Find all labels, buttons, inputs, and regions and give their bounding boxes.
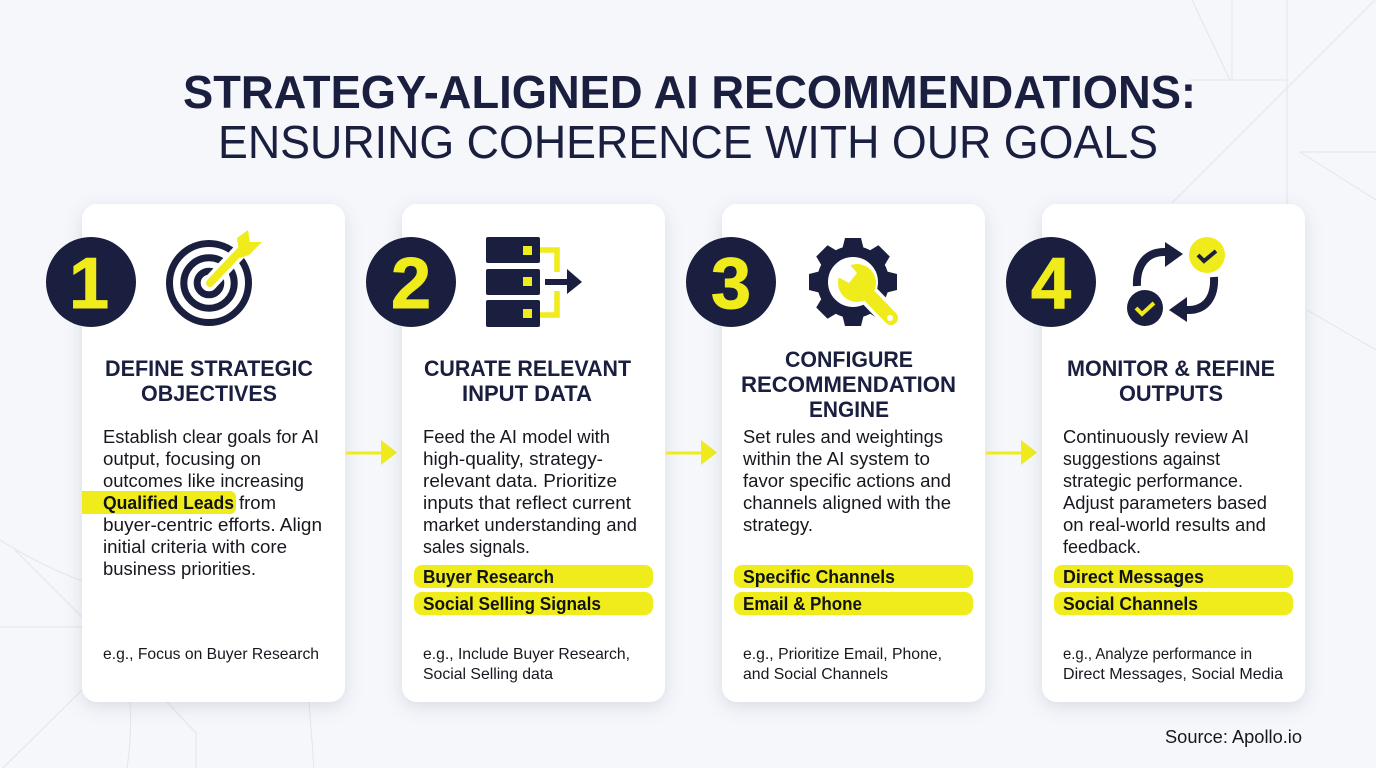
panel: step 3 configure recommendation engine [686,204,985,702]
body text: Adjust parameters based [1063,493,1267,513]
number badge 2 [366,237,456,327]
highlight tags: Social Channels [1063,594,1198,614]
body text: sales signals. [423,537,530,557]
number badge 1: 1 [69,244,109,324]
heading: CONFIGURE [785,347,913,372]
body text: high-quality, strategy- [423,449,603,469]
body text: relevant data. Prioritize [423,471,617,491]
highlight tags: Buyer Research [423,567,554,587]
icon: target with arrow [170,230,262,322]
body text: initial criteria with core [103,537,287,557]
body text: suggestions against [1063,449,1220,469]
heading [424,356,632,406]
example: e.g., Focus on Buyer Research [103,646,319,663]
highlight tags: Email & Phone [743,594,862,614]
highlight tags [734,565,973,615]
example [743,646,942,683]
example [423,646,630,683]
body text: buyer-centric efforts. Align [103,515,322,535]
highlight tags: Specific Channels [743,567,895,587]
panel: step 4 monitor and refine outputs [1006,204,1305,702]
icon: data servers with arrow [486,237,582,327]
body text [742,427,951,535]
body text: Establish clear goals for AI [103,427,319,447]
highlight tags [1054,565,1293,615]
arrow 3 to 4 [986,440,1037,465]
body text: channels aligned with the [743,493,951,513]
example: e.g., Prioritize Email, Phone, [743,646,942,663]
body text: inputs that reflect current [423,493,631,513]
heading: RECOMMENDATION [741,372,956,397]
highlight tags: Social Selling Signals [423,594,601,614]
body text [423,427,637,557]
heading [105,356,313,406]
example: e.g., Include Buyer Research, [423,646,630,663]
source: Source: Apollo.io [1165,727,1302,747]
body text: within the AI system to [742,449,930,469]
title: ENSURING COHERENCE WITH OUR GOALS [218,116,1158,168]
heading [1067,356,1275,406]
heading: INPUT DATA [462,381,592,406]
icon: gear and wrench [809,238,897,326]
example [1063,646,1283,683]
body text: outcomes like increasing [103,471,304,491]
number badge 1 [46,237,136,327]
panel: step 1 define strategic objectives [46,204,345,702]
heading: DEFINE STRATEGIC [105,356,313,381]
body text [1063,427,1267,557]
number badge 2: 2 [391,244,431,324]
heading [741,347,956,422]
icon: refresh cycle with checks [1127,237,1225,326]
number badge 4 [1006,237,1096,327]
heading: CURATE RELEVANT [424,356,632,381]
body text: Qualified Leads [103,493,234,513]
example: Direct Messages, Social Media [1063,666,1283,683]
heading: ENGINE [809,397,889,422]
example: Social Selling data [423,666,553,683]
heading: MONITOR & REFINE [1067,356,1275,381]
body text: business priorities. [103,559,256,579]
panel: step 2 curate relevant input data [366,204,665,702]
number badge 3 [686,237,776,327]
body text: feedback. [1063,537,1141,557]
body text: output, focusing on [103,449,261,469]
body text: Set rules and weightings [743,427,943,447]
arrow 2 to 3 [666,440,717,465]
number badge 3: 3 [711,244,751,324]
body text: market understanding and [423,515,637,535]
title: STRATEGY-ALIGNED AI RECOMMENDATIONS: [183,66,1196,118]
body text: Feed the AI model with [423,427,610,447]
highlight: qualified leads [82,491,236,514]
body text: on real-world results and [1063,515,1266,535]
body text: strategy. [743,515,813,535]
body text: favor specific actions and [743,471,951,491]
example: and Social Channels [743,666,888,683]
body text [103,427,322,579]
heading: OUTPUTS [1119,381,1223,406]
highlight tags [414,565,653,615]
arrow 1 to 2 [346,440,397,465]
title [183,66,1196,168]
body text: from [239,493,276,513]
heading: OBJECTIVES [141,381,277,406]
highlight tags: Direct Messages [1063,567,1204,587]
body text: strategic performance. [1063,471,1243,491]
number badge 4: 4 [1031,244,1071,324]
example: e.g., Analyze performance in [1063,646,1252,663]
body text: Continuously review AI [1063,427,1249,447]
